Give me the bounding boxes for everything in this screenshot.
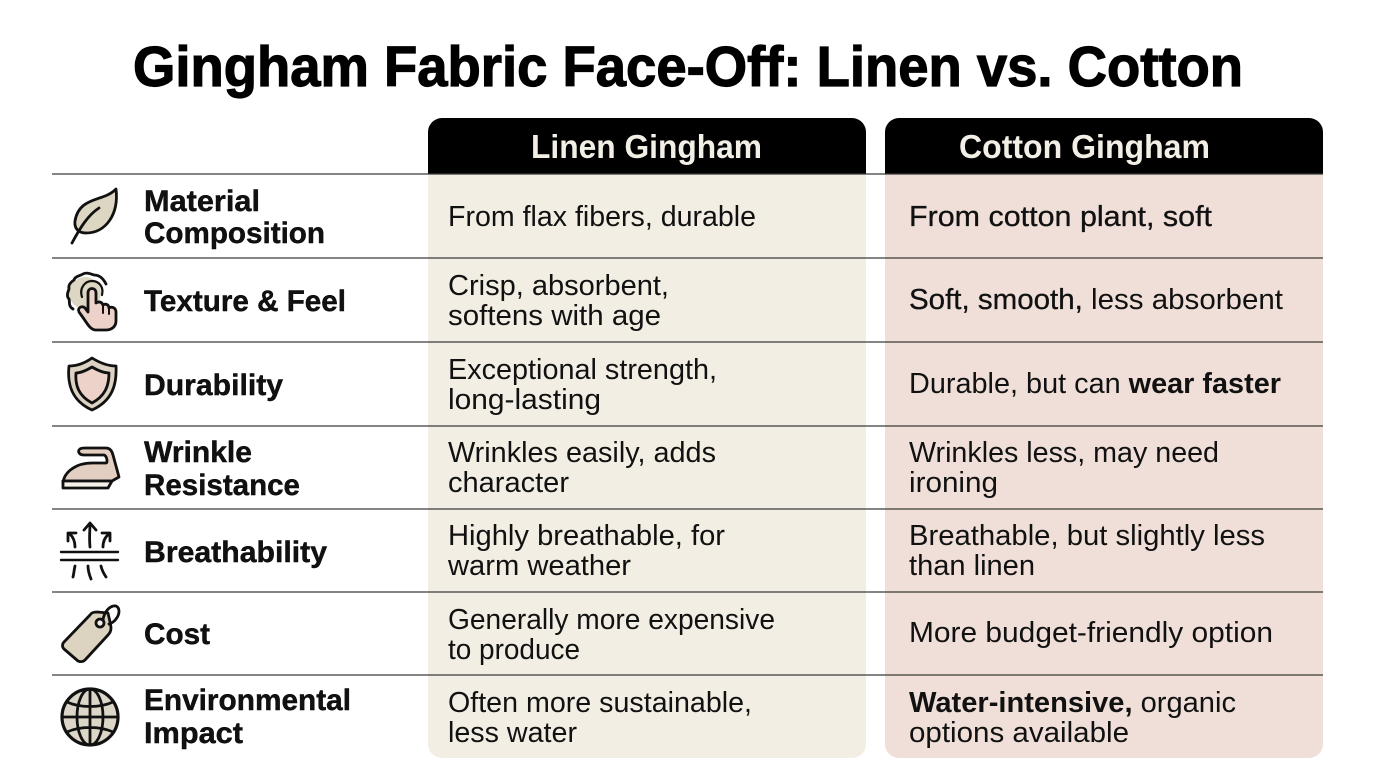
label: environmental impact: Environmental: [144, 684, 351, 717]
linen: cost: Generally more expensive: [448, 604, 775, 636]
icon: touch texture: [67, 273, 116, 330]
linen: environmental: less water: [448, 717, 577, 749]
linen: wrinkle: Wrinkles easily, adds: [448, 437, 716, 469]
panel: linen column background: [428, 150, 866, 758]
row: material composition: [72, 185, 1212, 250]
linen: cost: to produce: [448, 634, 580, 666]
icon: leaf: [72, 189, 116, 243]
icon: breathable fabric: [61, 523, 118, 579]
heading: linen gingham: Linen Gingham: [531, 128, 762, 165]
row: durability: [69, 354, 1281, 416]
cotton: cost: More budget-friendly option: [909, 617, 1273, 649]
cotton: breathability: Breathable, but slightly less: [909, 520, 1265, 552]
row: texture and feel: [67, 270, 1283, 332]
row: environmental impact: [62, 684, 1236, 750]
icon: iron: [63, 448, 119, 488]
row: wrinkle resistance: [63, 436, 1219, 502]
linen: durability: long-lasting: [448, 384, 601, 416]
label: environmental impact: [144, 684, 351, 750]
linen: wrinkle: [448, 437, 716, 499]
linen: breathability: [447, 520, 725, 582]
linen: durability: Exceptional strength,: [448, 354, 717, 386]
linen: texture: Crisp, absorbent,: [448, 270, 669, 302]
cotton: material: From cotton plant, soft: [909, 201, 1212, 233]
cotton: durability: Durable, but can wear faster: [909, 368, 1281, 400]
row: breathability: [61, 520, 1265, 582]
linen: breathability: Highly breathable, for: [448, 520, 725, 552]
linen: durability: [448, 354, 717, 416]
linen: cost: [448, 604, 775, 666]
cotton: breathability: than linen: [909, 550, 1035, 582]
cotton: environmental: options available: [909, 717, 1129, 749]
label: durability: Durability: [144, 369, 283, 402]
cotton: wrinkle: ironing: [909, 467, 998, 499]
label: wrinkle resistance: Wrinkle: [144, 436, 252, 469]
icon: shield: [69, 358, 116, 410]
heading: cotton gingham: [885, 118, 1323, 174]
label: wrinkle resistance: [144, 436, 300, 502]
label: material composition: Composition: [144, 217, 325, 250]
linen: environmental: Often more sustainable,: [448, 687, 752, 719]
linen: material: From flax fibers, durable: [448, 201, 756, 233]
label: breathability: Breathability: [144, 536, 327, 569]
cotton: wrinkle: Wrinkles less, may need: [909, 437, 1219, 469]
label: material composition: Material: [144, 185, 260, 218]
heading: linen gingham: [428, 118, 866, 174]
label: environmental impact: Impact: [144, 717, 243, 750]
linen: texture: softens with age: [448, 300, 661, 332]
icon: price tag: [62, 606, 119, 662]
title: Gingham Fabric Face-Off: Linen vs. Cotton: [133, 35, 1243, 99]
heading: cotton gingham: Cotton Gingham: [959, 128, 1210, 165]
icon: globe: [62, 689, 118, 745]
cotton: wrinkle: [909, 437, 1219, 499]
cotton: breathability: [909, 520, 1265, 582]
cotton: texture: Soft, smooth, less absorbent: [909, 284, 1283, 316]
label: material composition: [144, 185, 325, 250]
label: wrinkle resistance: Resistance: [144, 469, 300, 502]
linen: wrinkle: character: [448, 467, 569, 499]
row: cost: [62, 604, 1273, 666]
panel: cotton column background: [885, 150, 1323, 758]
linen: environmental: [448, 687, 752, 749]
cotton: environmental: Water-intensive, organic: [909, 687, 1236, 719]
cotton: environmental: [909, 687, 1236, 749]
label: cost: Cost: [144, 618, 210, 651]
linen: texture: [448, 270, 669, 332]
linen: breathability: warm weather: [447, 550, 631, 582]
label: texture and feel: Texture & Feel: [144, 285, 346, 318]
